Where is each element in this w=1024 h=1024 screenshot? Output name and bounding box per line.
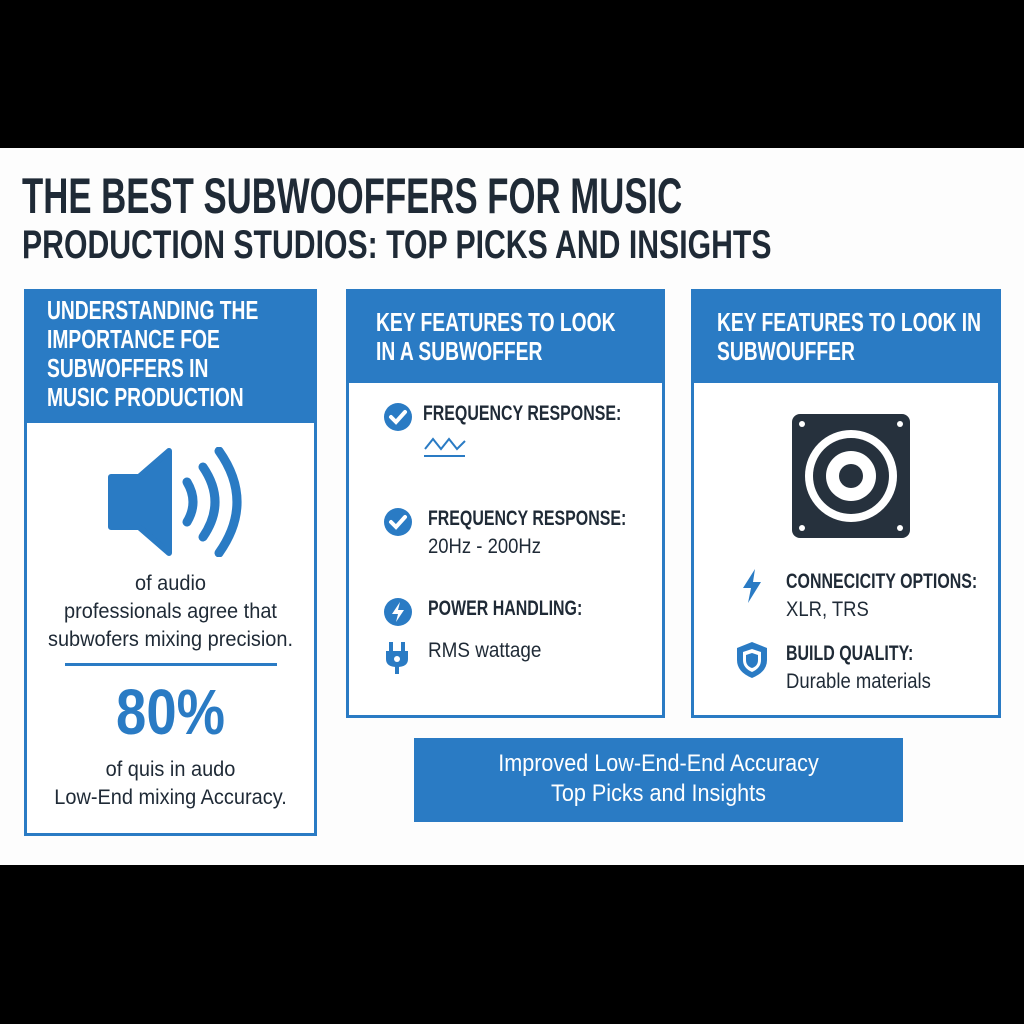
stat: 80%: 80% <box>116 676 225 748</box>
title: THE BEST SUBWOOFFERS FOR MUSIC <box>22 168 682 224</box>
item: frequency range <box>384 507 626 558</box>
item: connectivity: CONNECICITY OPTIONS: <box>786 570 977 593</box>
panel: importance <box>24 289 317 836</box>
callout: improved accuracy <box>414 738 903 822</box>
heading: specs <box>694 292 998 383</box>
item: frequency response <box>384 402 621 457</box>
callout: improved accuracy: Top Picks and Insights <box>551 780 766 807</box>
panel: subwoofer specs <box>691 289 1001 718</box>
white background <box>0 148 1024 865</box>
panel: key features <box>346 289 665 718</box>
text: agree stat: subwofers mixing precision. <box>48 628 293 651</box>
text: agree stat: of audio <box>135 572 206 595</box>
item: power handling <box>384 597 582 626</box>
heading: key features <box>349 292 662 383</box>
item: connectivity: XLR, TRS <box>786 598 869 621</box>
item: rms wattage: RMS wattage <box>428 639 541 662</box>
item: build quality: BUILD QUALITY: <box>786 642 913 665</box>
title: PRODUCTION STUDIOS: TOP PICKS AND INSIGHTS <box>22 223 771 267</box>
item: power handling: POWER HANDLING: <box>428 597 582 620</box>
title <box>22 168 771 267</box>
item: build quality: Durable materials <box>786 670 931 693</box>
icon: speaker <box>108 447 242 557</box>
item: frequency response: FREQUENCY RESPONSE: <box>423 402 621 425</box>
heading: specs: SUBWOUFFER <box>717 336 855 366</box>
heading: key features: KEY FEATURES TO LOOK <box>376 307 615 337</box>
heading: specs: KEY FEATURES TO LOOK IN <box>717 307 981 337</box>
heading: importance: MUSIC PRODUCTION <box>47 382 244 412</box>
heading: importance <box>27 292 314 423</box>
item: frequency range: 20Hz - 200Hz <box>428 535 541 558</box>
item: build quality <box>737 642 931 693</box>
text: agree stat <box>48 572 293 651</box>
heading: key features: IN A SUBWOFFER <box>376 336 542 366</box>
heading: importance: UNDERSTANDING THE <box>47 295 258 325</box>
item: rms wattage <box>386 639 541 674</box>
icon: subwoofer <box>792 414 910 538</box>
divider <box>65 663 277 666</box>
text: agree stat: professionals agree that <box>64 600 277 623</box>
item: connectivity <box>743 569 977 621</box>
text: accuracy <box>54 758 287 809</box>
text: accuracy: Low-End mixing Accuracy. <box>54 786 287 809</box>
text: accuracy: of quis in audo <box>106 758 235 781</box>
heading: importance: IMPORTANCE FOE <box>47 324 220 354</box>
heading: importance: SUBWOFFERS IN <box>47 353 208 383</box>
item: frequency range: FREQUENCY RESPONSE: <box>428 507 626 530</box>
callout: improved accuracy: Improved Low-End-End Accuracy <box>498 750 819 777</box>
